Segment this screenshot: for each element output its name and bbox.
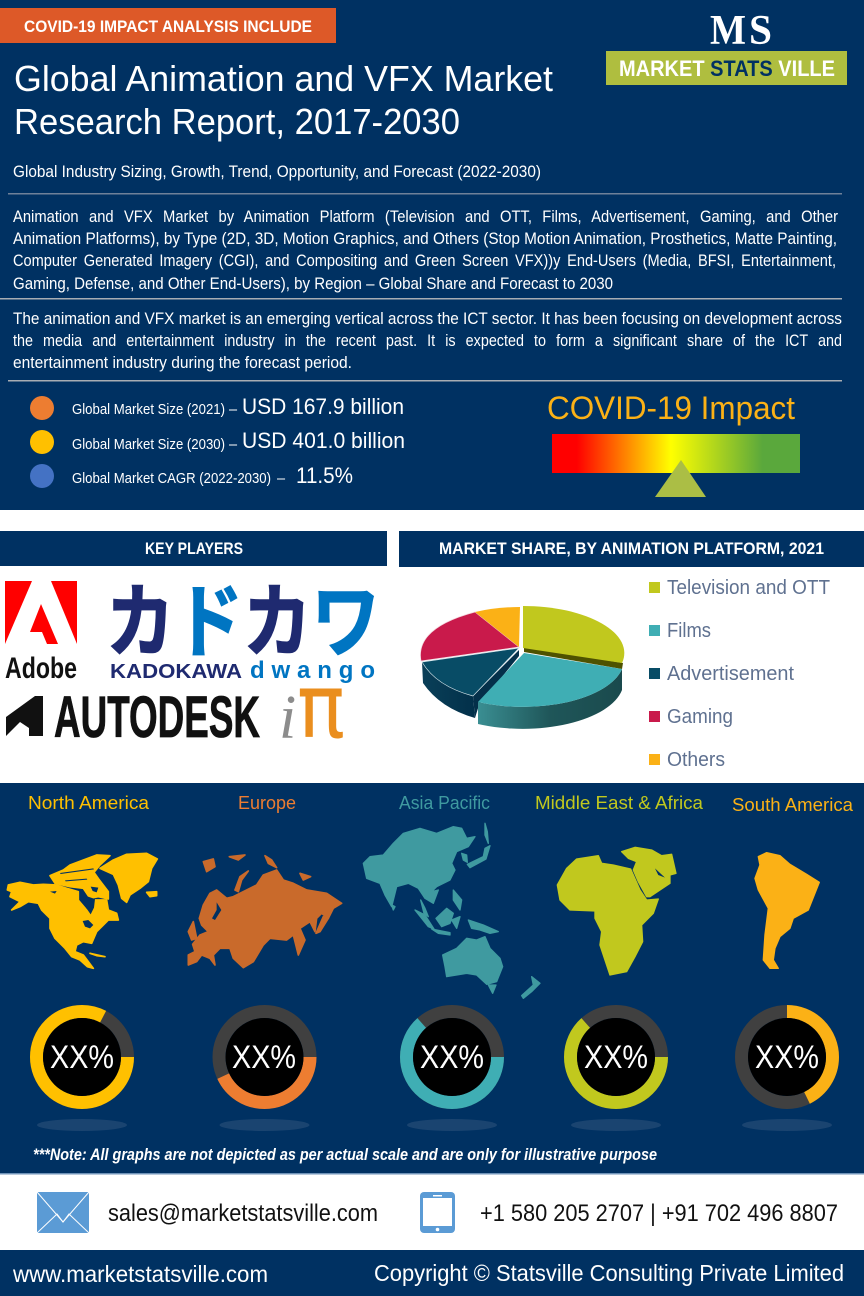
donut: Asia Pacific	[406, 1012, 498, 1131]
chart: 3D pie of market share	[420, 606, 624, 729]
donut: North America	[36, 1012, 128, 1131]
icon: email	[37, 1192, 89, 1233]
text block: market segmentation	[13, 208, 838, 293]
donut: Middle East and Africa	[570, 1012, 662, 1131]
donut: North America: XX%	[50, 1039, 114, 1075]
badge: COVID-19 impact analysis: COVID-19 IMPACT ANALYSIS INCLUDE	[24, 18, 312, 36]
subtitle: Global Industry Sizing, Growth, Trend, Opportunity, and Forecast (2022-2030)	[13, 163, 541, 181]
logo: Adobe	[5, 581, 77, 685]
footer: Copyright © Statsville Consulting Private Limited	[374, 1260, 844, 1286]
map: Asia Pacific	[363, 823, 540, 998]
logo: i-pi: i	[279, 684, 296, 752]
metric: market CAGR: 11.5%	[296, 463, 353, 488]
logo: Adobe: Adobe	[5, 652, 77, 685]
logo: i-pi	[279, 655, 345, 758]
logo: Kadokawa Dwango: カドカワ	[106, 558, 380, 674]
heading: market share	[399, 531, 864, 567]
pie slice: advertisement cut face	[473, 650, 519, 718]
legend: platform	[649, 577, 830, 771]
footer: www.marketstatsville.com	[12, 1261, 268, 1287]
metric: market size 2030: Global Market Size (2030)	[72, 437, 225, 453]
note: ***Note: All graphs are not depicted as per actual scale and are only for illustrative purpose	[33, 1146, 657, 1164]
icon: phone	[420, 1192, 455, 1233]
logo: i-pi: π	[297, 655, 345, 758]
pie slice: television and OTT	[523, 606, 624, 663]
heading: key players	[0, 531, 387, 566]
text block: market description	[13, 310, 842, 372]
metric: market CAGR: –	[277, 471, 286, 487]
footer	[0, 1250, 864, 1296]
pie slice: advertisement side	[422, 662, 475, 718]
metric: market CAGR: Global Market CAGR (2022-2030)	[72, 471, 271, 487]
metric: market CAGR	[30, 463, 353, 488]
metric: market size 2021: Global Market Size (2021)	[72, 402, 225, 418]
map: North America	[7, 853, 157, 968]
pie slice: films	[478, 653, 622, 707]
legend: platform: Gaming	[667, 706, 733, 728]
metric: market size 2021: –	[229, 402, 238, 418]
legend: platform: Advertisement	[667, 663, 794, 685]
label: North America: North America	[28, 793, 150, 813]
badge: COVID-19 impact analysis	[0, 8, 336, 43]
legend: platform: Films	[667, 620, 711, 642]
heading: key players: KEY PLAYERS	[145, 540, 243, 558]
text block: market segmentation: Gaming, Defense, and Other End-Users), by Region – Global Share and Forecast to 2030	[13, 275, 613, 293]
metric: market size 2030: USD 401.0 billion	[242, 428, 405, 453]
title: Research Report, 2017-2030	[14, 101, 460, 142]
legend: platform: Others	[667, 749, 725, 771]
gauge: COVID-19 impact: COVID-19 Impact	[547, 390, 795, 426]
logo: Market Stats Ville: MARKET STATS VILLE	[619, 56, 835, 81]
logo: Market Stats Ville	[606, 8, 847, 85]
contact: phone numbers: +1 580 205 2707 | +91 702 496 8807	[480, 1200, 838, 1227]
donut: Europe: XX%	[232, 1039, 296, 1075]
logo: Market Stats Ville: S	[749, 8, 772, 54]
map: South America	[755, 853, 819, 968]
title	[14, 58, 553, 142]
logo: Kadokawa Dwango: dwango	[250, 657, 375, 684]
donut: Asia Pacific: XX%	[420, 1039, 484, 1075]
panel: header background	[0, 0, 864, 510]
pie slice: films side	[478, 669, 622, 729]
pie slice: television side	[524, 647, 623, 669]
logo: Autodesk	[6, 685, 260, 750]
panel: regional background	[0, 783, 864, 1173]
map: Middle East and Africa	[557, 847, 676, 975]
logo: Autodesk: AUTODESK	[54, 685, 260, 750]
donut: South America	[742, 1012, 832, 1131]
pie slice: others	[475, 607, 520, 647]
label: Europe: Europe	[238, 793, 296, 813]
metric: market size 2030	[30, 428, 405, 454]
pie slice: advertisement	[422, 648, 519, 696]
map: Europe and Russia	[188, 855, 342, 968]
title: Global Animation and VFX Market	[14, 58, 553, 99]
logo: Kadokawa Dwango: KADOKAWA	[110, 661, 242, 683]
logo: Market Stats Ville: M	[710, 8, 746, 54]
metric: market size 2021: USD 167.9 billion	[242, 394, 404, 419]
label: South America: South America	[732, 795, 854, 815]
contact: email address: sales@marketstatsville.com	[108, 1200, 378, 1227]
donut: Europe	[219, 1012, 310, 1131]
gauge: COVID-19 impact	[547, 390, 800, 497]
donut: South America: XX%	[755, 1039, 819, 1075]
pie slice: gaming	[420, 612, 519, 661]
donut: Middle East and Africa: XX%	[584, 1039, 648, 1075]
metric: market size 2030: –	[229, 437, 238, 453]
metric: market size 2021	[30, 394, 404, 420]
label: Middle East and Africa: Middle East & Africa	[535, 793, 704, 813]
label: Asia Pacific: Asia Pacific	[399, 793, 490, 813]
text block: market description: entertainment industry during the forecast period.	[13, 354, 352, 372]
legend: platform: Television and OTT	[667, 577, 830, 599]
heading: market share: MARKET SHARE, BY ANIMATION PLATFORM, 2021	[439, 540, 824, 558]
